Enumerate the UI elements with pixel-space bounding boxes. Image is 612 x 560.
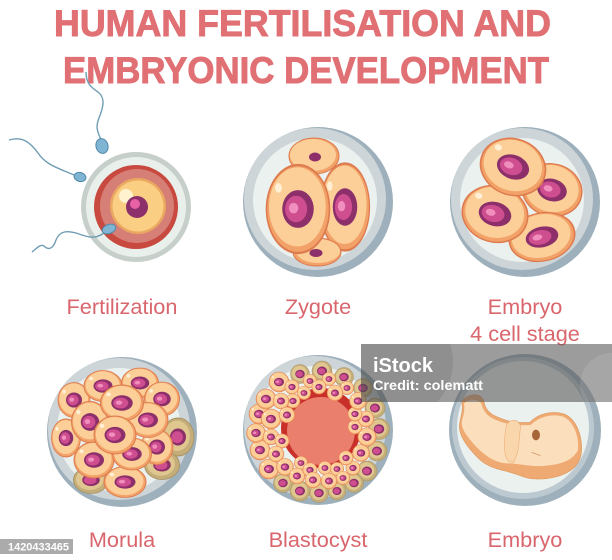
label: zygote: Zygote — [285, 294, 351, 319]
blastocoel cavity — [281, 388, 361, 468]
panel: embryo 4 cell stage — [450, 127, 600, 277]
right cell — [516, 157, 588, 223]
watermark overlay: Credit: colematt — [373, 377, 483, 393]
label: fertilization: Fertilization — [67, 294, 177, 319]
egg — [81, 152, 191, 262]
label: morula: Morula — [89, 527, 156, 552]
inner cells — [261, 372, 376, 489]
sperm bottom — [32, 222, 117, 252]
panel: zygote — [243, 127, 393, 277]
bottom cell — [505, 207, 579, 267]
label: embryo: Embryo — [488, 527, 562, 552]
title: EMBRYONIC DEVELOPMENT — [63, 50, 549, 91]
title: HUMAN FERTILISATION AND — [54, 3, 551, 44]
top cell — [472, 129, 554, 205]
sperm left — [9, 139, 87, 183]
panel: fertilization egg and sperm — [9, 72, 191, 262]
right cell — [320, 164, 370, 250]
panel: blastocyst — [243, 355, 393, 505]
panel: embryo — [449, 354, 601, 506]
left cell — [456, 178, 534, 250]
watermark overlay — [361, 344, 612, 402]
label: blastocyst: Blastocyst — [269, 527, 367, 552]
label: embryo 4 cell stage: Embryo — [488, 294, 562, 319]
watermark overlay: iStock — [373, 355, 434, 377]
fetus — [459, 395, 582, 479]
left cell — [266, 165, 330, 253]
image id badge: 1420433465 — [8, 542, 69, 554]
title — [54, 3, 551, 91]
sperm top — [86, 72, 110, 155]
panel: morula — [47, 357, 197, 507]
image id badge — [0, 539, 73, 554]
bottom cell — [293, 238, 341, 266]
labels — [67, 294, 580, 552]
labels: 4 cell stage — [470, 321, 580, 346]
top cell — [289, 138, 339, 174]
outer cells — [246, 361, 390, 502]
